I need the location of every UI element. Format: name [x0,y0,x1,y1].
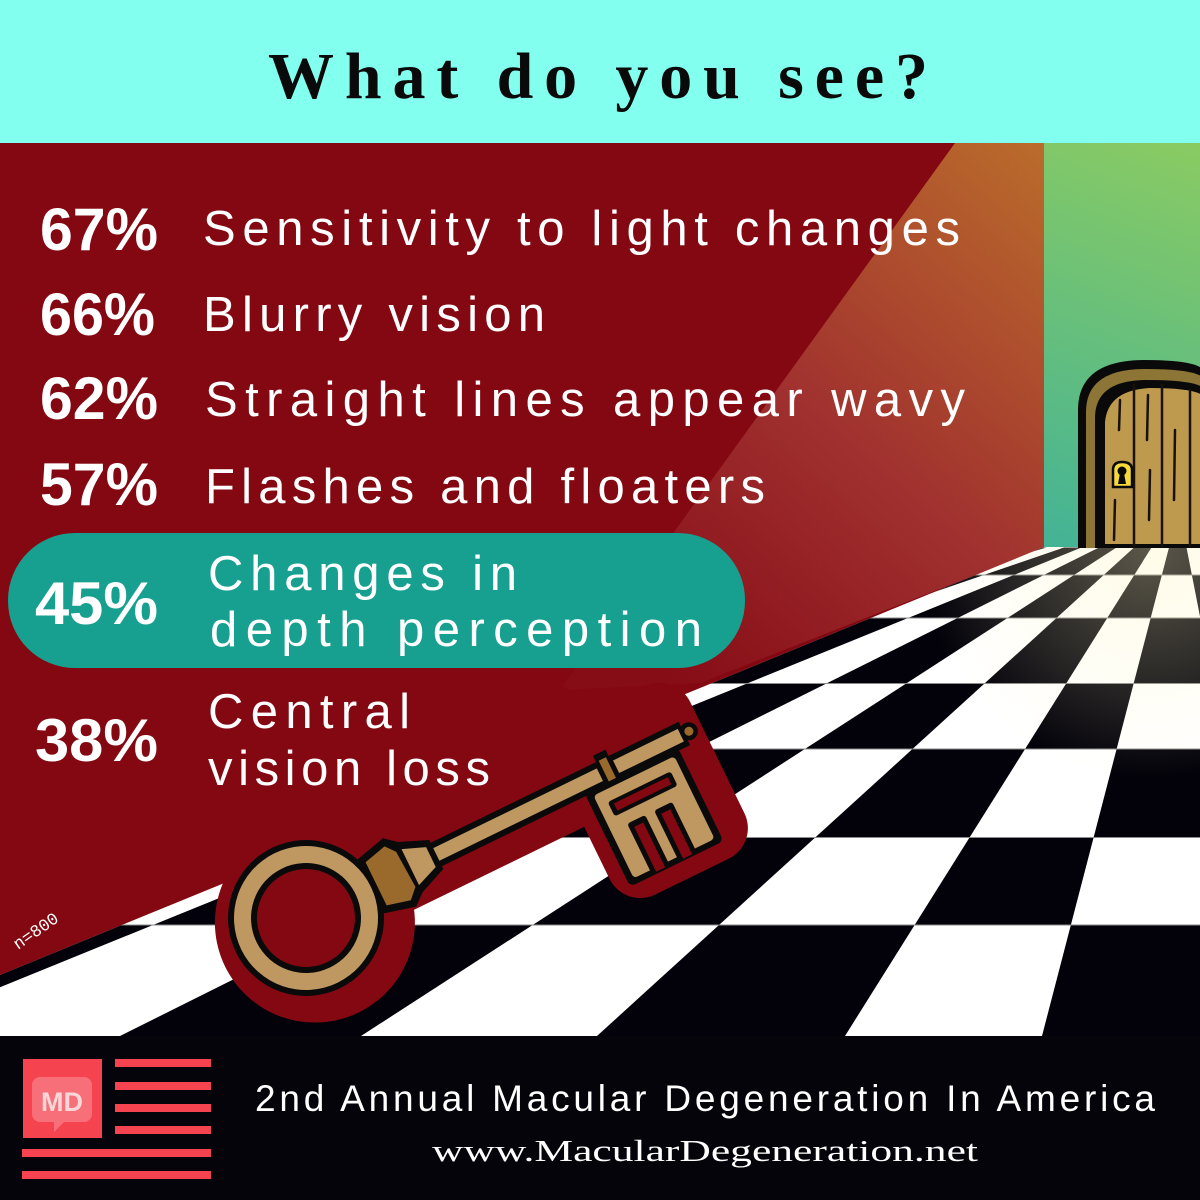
highlighted stat pill [8,533,745,668]
title: What do you see? [268,40,928,113]
stat 57%: Flashes and floaters [205,460,765,514]
stat 57% [40,451,765,518]
logo: MD flag [22,1059,211,1179]
red wall [0,143,1044,1036]
light beam on wall [560,143,1044,690]
sample size note: n=800 [11,910,63,955]
stat 38%: vision loss [208,742,490,796]
door [1078,360,1200,548]
footer title: 2nd Annual Macular Degeneration In America [255,1078,1155,1119]
stat 66%: Blurry vision [203,288,545,342]
stat 38%: 38% [35,707,158,774]
stat 45%: depth perception [210,603,702,657]
stat 66% [40,281,545,348]
back wall [1044,143,1200,548]
logo: MD flag: MD [41,1087,83,1117]
icon: keyhole [1113,462,1132,487]
footer band [0,1036,1200,1200]
key illustration [173,626,759,1078]
stat 67% [40,196,960,263]
stat 57%: 57% [40,451,158,518]
stat 45% [35,547,702,657]
checkered floor [0,540,1200,1040]
header band [0,0,1200,143]
stat 45%: Changes in [208,547,517,601]
stat list [35,196,966,796]
stat 66%: 66% [40,281,155,348]
stat 62%: 62% [40,365,158,432]
stat 67%: Sensitivity to light changes [203,202,960,256]
stat 62%: Straight lines appear wavy [205,373,966,427]
stat 45%: 45% [35,570,158,637]
stat 38%: Central [208,685,410,739]
footer url: www.MacularDegeneration.net [432,1133,979,1168]
stat 67%: 67% [40,196,158,263]
stat 62% [40,365,966,432]
stat 38% [35,685,490,796]
